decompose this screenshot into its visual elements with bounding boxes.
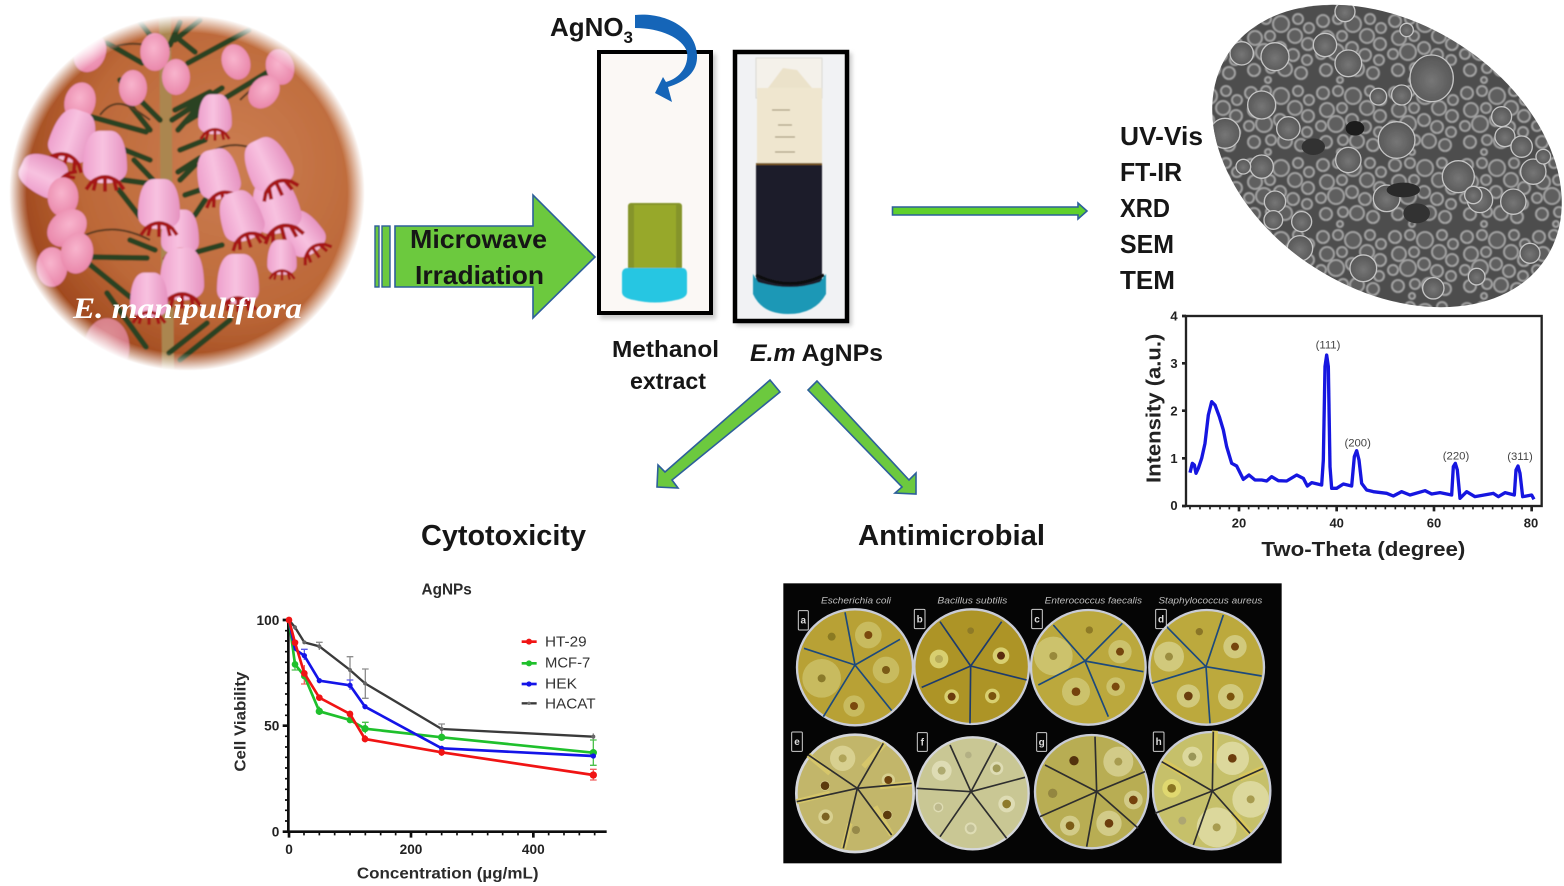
plate d [1149, 610, 1264, 725]
XRD tick labels: 4 [1170, 309, 1178, 324]
chart: cell viability [233, 582, 607, 883]
panel: antimicrobial petri dishes [783, 583, 1282, 863]
species headings: Escherichia coli [821, 595, 892, 605]
text block: characterization methods: UV-Vis [1120, 121, 1203, 151]
XRD tick labels: 3 [1170, 356, 1178, 371]
plate letter labels: b [917, 614, 923, 625]
plate letter labels: f [921, 737, 925, 748]
text block: characterization methods: XRD [1120, 193, 1170, 223]
chart: cell viability: Cell Viability [233, 671, 250, 772]
plate letter labels: e [794, 737, 800, 748]
XRD tick labels [1170, 309, 1538, 530]
plate b [914, 609, 1029, 724]
error bars [292, 625, 597, 780]
panel: methanol extract tube [599, 52, 716, 319]
plate c [1031, 610, 1146, 725]
tick labels: 0 [285, 842, 293, 857]
tick labels: 0 [272, 825, 280, 840]
plate letter labels: g [1039, 737, 1045, 748]
legend: HACAT [545, 696, 596, 712]
chart: XRD pattern [1143, 309, 1542, 561]
species headings: Bacillus subtilis [937, 595, 1008, 605]
arrow: to cytotoxicity [657, 380, 780, 488]
legend [522, 635, 596, 712]
plate h [1153, 731, 1270, 849]
tick labels: 50 [264, 719, 280, 734]
XRD tick labels: 60 [1427, 515, 1441, 530]
chart axes [283, 619, 607, 838]
plate a [797, 609, 913, 725]
label: Methanol extract: Methanol [612, 336, 719, 362]
species headings: Staphylococcus aureus [1158, 595, 1263, 605]
label: E.m AgNPs: E.m AgNPs [750, 340, 883, 367]
plate letter labels: a [801, 616, 807, 627]
axis titles: Concentration (µg/mL) [357, 866, 538, 883]
species headings [821, 595, 1263, 605]
arrow: Microwave Irradiation [375, 195, 595, 318]
XRD axis titles: Two-Theta (degree) [1261, 539, 1465, 561]
label: Methanol extract [612, 336, 719, 394]
image: SEM micrograph [1212, 4, 1562, 308]
legend: MCF-7 [545, 656, 590, 672]
legend: HT-29 [545, 635, 587, 651]
photo: E. manipuliflora flower [9, 15, 365, 376]
plate letter labels: c [1034, 614, 1040, 625]
series: MCF-7 [289, 620, 597, 756]
tick labels: 100 [257, 613, 280, 628]
plate letter labels: d [1158, 614, 1164, 625]
XRD peak labels: (311) [1507, 451, 1533, 463]
XRD peak labels [1316, 340, 1533, 463]
chart: XRD pattern: Intensity (a.u.) [1143, 334, 1165, 483]
XRD peak labels: (111) [1316, 340, 1341, 352]
text block: characterization methods: SEM [1120, 229, 1174, 259]
label: Methanol extract: extract [630, 368, 706, 394]
plate letter labels [792, 609, 1166, 751]
plant name label: E. manipuliflora [72, 292, 302, 325]
series: HACAT [289, 620, 595, 739]
tick labels [257, 613, 545, 857]
heading: Cytotoxicity: Cytotoxicity [421, 520, 586, 552]
text block: characterization methods: FT-IR [1120, 157, 1182, 187]
arrow: Microwave Irradiation: Microwave [410, 224, 547, 254]
XRD curve [1190, 355, 1534, 499]
XRD tick labels: 1 [1170, 451, 1178, 466]
arrow: AgNO3 addition [635, 15, 697, 102]
plate e [796, 735, 914, 852]
XRD peak labels: (200) [1344, 438, 1371, 450]
XRD tick labels: 0 [1170, 498, 1178, 513]
arrow: Microwave Irradiation: Irradiation [415, 260, 544, 290]
plate f [917, 737, 1029, 849]
XRD tick labels: 20 [1232, 515, 1246, 530]
plate letter labels: h [1156, 737, 1162, 748]
legend: HEK [545, 676, 577, 692]
XRD peak labels: (220) [1443, 451, 1469, 463]
XRD plot frame [1182, 316, 1542, 511]
chart title: AgNPs [422, 582, 472, 599]
tick labels: 400 [522, 842, 545, 857]
text block: characterization methods [1120, 121, 1203, 295]
arrow: to characterization [892, 203, 1087, 219]
XRD tick labels: 80 [1524, 515, 1538, 530]
XRD tick labels: 40 [1329, 515, 1344, 530]
XRD tick labels: 2 [1170, 403, 1178, 418]
plate g [1035, 735, 1148, 848]
tick labels: 200 [400, 842, 423, 857]
arrow: to antimicrobial [808, 381, 916, 494]
heading: Antimicrobial: Antimicrobial [858, 520, 1045, 552]
series: HT-29 [286, 617, 597, 779]
label: AgNO3: 3 [624, 28, 633, 47]
label: AgNO3: AgNO [550, 12, 624, 42]
panel: E.m AgNPs tube [735, 52, 852, 326]
series: HEK [289, 620, 596, 759]
text block: characterization methods: TEM [1120, 265, 1175, 295]
species headings: Enterococcus faecalis [1045, 595, 1142, 605]
